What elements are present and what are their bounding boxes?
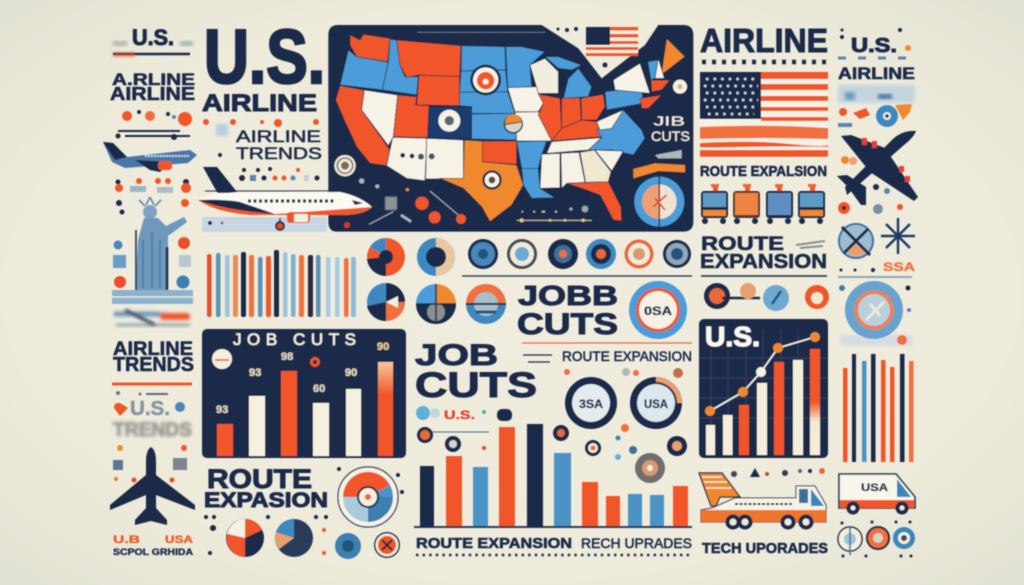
bar values: 90 [377,341,389,353]
label: U.B USA: USA [165,534,193,546]
right column heading: U.S. Airline [838,28,915,83]
label: Route Expansion bottom: ROUTE EXPANSION [416,535,572,552]
heading: Airline Trends lower [113,339,194,376]
main title: U.S. Airline: U.S. [204,15,325,100]
top line on map [418,31,545,33]
icon: top-view airplane [110,445,195,525]
bus 3 [766,184,793,224]
badge: USA ring right [630,377,682,429]
split dial left [416,284,456,324]
dots near pies [204,467,404,555]
left column heading: U.S. Airline [110,25,195,140]
heading: Airline Trends: AIRLINE [236,127,321,146]
icon row under route expansion [704,283,829,311]
right column heading: U.S. Airline: U.S. [851,35,897,57]
icon: airplane dial [839,281,912,346]
label: SSA: SSA [883,260,915,274]
big airplane [198,167,372,232]
icon: small flag above map [556,27,638,68]
bus 2 [733,184,760,224]
infographic content [103,15,918,559]
donut chart 2 [367,283,405,321]
badge: orange cross [374,532,400,558]
icon: USA delivery van: USA [861,482,888,494]
circles row: charts and dials [367,238,691,321]
label: Job Cuts on map: CUTS [651,129,690,144]
bar values: 60 [313,383,325,395]
pie chart: small right [275,519,313,557]
small icon row above trucks [731,468,825,477]
trend line [705,332,820,416]
panel: USA map [328,25,693,232]
map marker: dots on Arizona [400,153,435,160]
label: U.S. red [416,406,486,422]
left column heading: U.S. Airline: AIRLINE [110,84,195,104]
pie chart: large [338,467,398,527]
heading: Airline Trends lower: AIRLINE [113,339,193,360]
dots row under title [203,119,319,172]
label: Route Expansion small: ROUTE EXPANSION [562,348,692,364]
decorative dots row beside statue [115,178,191,214]
dial 4 [548,239,578,269]
icons: three gauges [838,520,915,558]
dots strip [838,268,912,277]
label: Tech Uporades: TECH UPORADES [702,540,828,557]
small plane silhouette on map [633,150,685,178]
heading: Route Expansion [700,234,827,276]
heading: Route Expansion: ROUTE [701,234,784,255]
heading: Route Expasion: ROUTE [207,464,312,494]
small rule marks [523,355,552,362]
map background [328,25,693,232]
right heading: Airline: AIRLINE [700,22,828,59]
dial 7 [663,240,691,268]
badge: USA ring left: 3SA [579,399,603,411]
dial 3 [507,239,537,269]
donut chart 1 [367,238,405,276]
badge: USA ring [629,281,687,339]
badge: USA ring: 0SA [644,306,672,318]
badge: seal [334,155,356,176]
panel: U.S. line and bar chart [699,319,828,458]
bar values: 98 [281,351,293,363]
label: Job Cuts on map: JIB [653,114,685,129]
label: Route Expalsion: ROUTE EXPALSION [700,163,827,180]
left column heading: U.S. Airline: A.RLINE [112,70,195,89]
icons: row of four buses [701,184,825,224]
blurred label: U.S. Trends: U.S. [130,398,170,420]
label: U.B USA: U.B [113,534,140,546]
timeline scale on map [517,206,592,222]
label: Job Cuts on map [651,114,690,144]
dial 2 [468,239,498,269]
small icon cluster [838,104,912,127]
bars [706,349,820,455]
bar chart: center [414,368,692,527]
label: U.S. red: U.S. [444,408,475,422]
bus 1 [701,184,728,224]
heading: Jobb Cuts: JOBB [518,280,618,311]
striped bar strip [207,250,356,317]
heading: Airline Trends: TRENDS [236,144,322,163]
striped vertical bars [843,354,914,462]
badge: white dot [673,80,687,94]
left column heading: U.S. Airline: U.S. [132,25,174,50]
panel heading: JOB CUTS [233,330,356,349]
small icon row [239,175,320,181]
bar values: 93 [216,404,228,416]
heading: Job Cuts large: JOB [415,339,498,372]
icon: dark airplane [837,131,918,214]
US states [336,34,685,222]
icon: large truck [699,473,826,530]
chart icons [212,349,320,369]
icon: crossed wheel [839,224,873,258]
badge: USA ring right: USA [644,399,668,411]
dotted strip bottom [416,554,692,556]
heading: Airline Trends lower: TRENDS [113,354,194,376]
pie chart: small left [226,519,264,557]
icon: USA delivery van [839,474,915,514]
heading: Route Expansion: EXPANSION [700,251,827,273]
heading: Job Cuts large [415,339,537,405]
bar values [216,341,389,416]
icon: small side-view airplane [103,142,197,172]
heading: Job Cuts large: CUTS [415,366,537,405]
heading: Jobb Cuts [517,280,618,341]
badge: blue circle [335,533,361,559]
bar values: 90 [345,367,357,379]
dial 5 [586,239,616,269]
split dial right [466,284,506,324]
panel heading: U.S. [705,321,760,352]
heading: Route Expasion: EXPASION [204,489,328,512]
dial 1 [417,238,455,276]
icon: star burst [881,218,915,254]
heading: Jobb Cuts: CUTS [517,308,618,341]
badge: USA ring left [565,377,617,429]
label: U.B USA [113,534,194,557]
panel: Job Cuts bar chart [202,329,406,458]
icon: American flag [700,72,828,159]
main title: U.S. Airline: AIRLINE [202,90,317,117]
heading: Airline Trends [236,127,322,163]
icon: Statue of Liberty [112,197,193,304]
dial 6 [624,240,654,268]
blurred label: U.S. Trends [113,391,192,441]
small icons on map [359,178,466,224]
map marker: Dakotas [470,65,501,95]
blurred airplane strip [114,310,190,325]
bus 4 [798,184,825,224]
chart markers [417,368,687,483]
map marker: Colorado [438,110,460,132]
main title: U.S. Airline [202,15,325,117]
label: U.B USA: SCPOL GRHIDA [113,547,194,557]
right column heading: U.S. Airline: AIRLINE [838,64,915,83]
map marker: Texas [482,170,502,190]
heading: Route Expasion [204,464,328,512]
map dial [634,177,684,227]
blurred data strip [838,85,915,103]
bars [217,362,393,456]
label: Rech Uprades: RECH UPRADES [581,535,692,551]
blurred label: U.S. Trends: TRENDS [113,420,192,441]
map marker: Missouri [504,114,523,134]
bar values: 93 [249,367,261,379]
grid [700,330,827,455]
